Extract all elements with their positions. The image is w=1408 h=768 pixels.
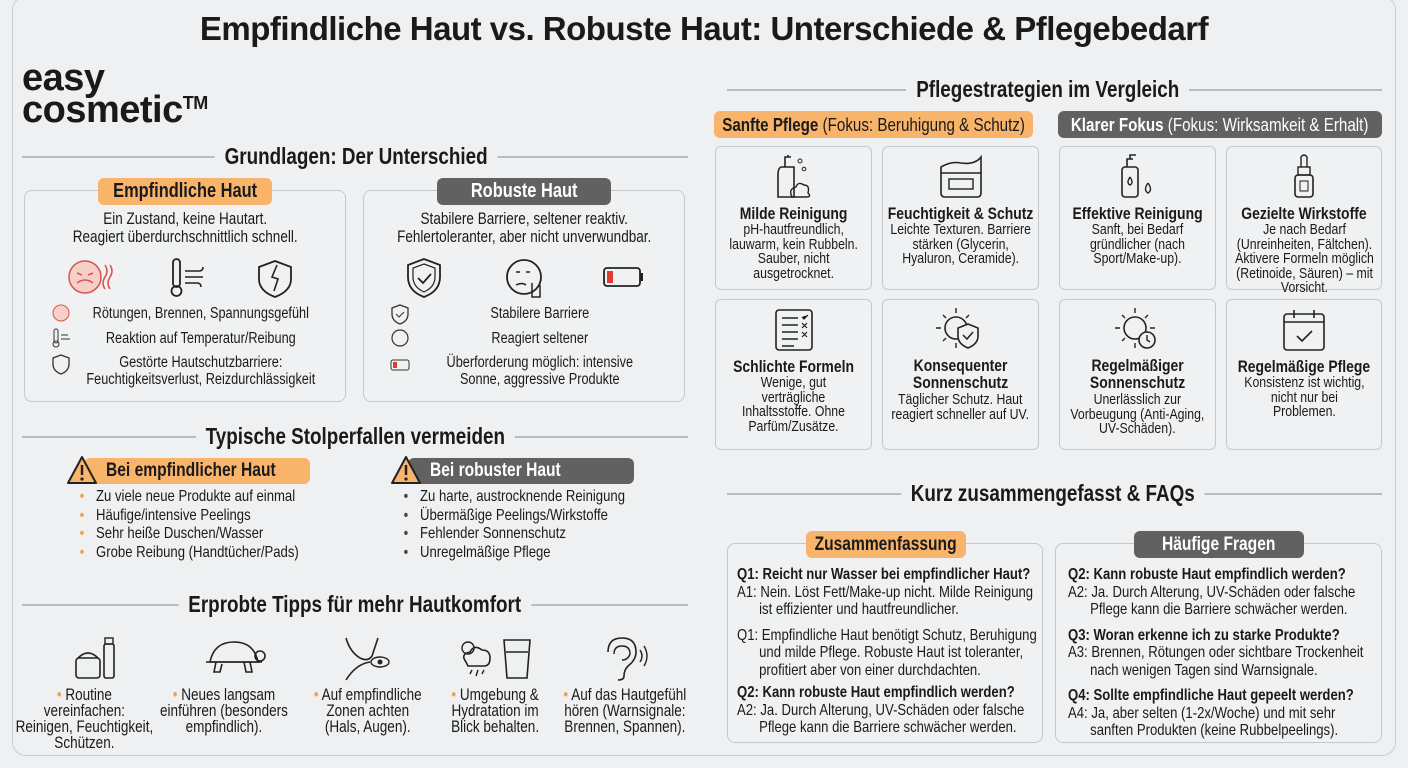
panel: Zusammenfassung — [727, 543, 1043, 743]
list: Fehlender Sonnenschutz — [420, 525, 566, 542]
card: Milde Reinigung: Milde Reinigung — [740, 204, 847, 223]
card: Konsequenter Sonnenschutz: Sonnenschutz — [913, 373, 1008, 392]
card: Schlichte Formeln: Schlichte Formeln — [733, 357, 854, 376]
card: Schlichte Formeln — [715, 299, 872, 450]
logo: cosmeticTM — [22, 89, 208, 131]
list — [404, 488, 625, 560]
badge: Robuste Haut: Robuste Haut — [471, 180, 577, 202]
card: Gezielte Wirkstoffe: Je nach Bedarf (Unreinheiten, Fältchen). Aktivere Formeln möglich (Retinoide, Säuren) – mit Vorsicht. — [1235, 221, 1373, 296]
list: Grobe Reibung (Handtücher/Pads) — [96, 544, 299, 560]
tip 3: • Auf empfindliche Zonen achten (Hals, Augen). — [314, 686, 422, 736]
panel: Empfindliche Haut: Reaktion auf Temperatur/Reibung — [106, 330, 296, 347]
heading: Pflegestrategien: Pflegestrategien im Vergleich — [916, 76, 1180, 102]
tip 2 — [160, 641, 288, 736]
card: Feuchtigkeit & Schutz: Feuchtigkeit & Schutz — [888, 204, 1033, 223]
text: description: Stabilere Barriere, seltener reaktiv. — [420, 210, 628, 228]
card: Milde Reinigung: pH-hautfreundlich, lauwarm, kein Rubbeln. Sauber, nicht ausgetrocknet. — [729, 221, 858, 282]
card: Effektive Reinigung: Effektive Reinigung — [1072, 204, 1203, 223]
card: Milde Reinigung — [715, 146, 872, 290]
logo — [22, 57, 208, 131]
faq text: Q1: Empfindliche Haut benötigt Schutz, Beruhigung und milde Pflege. Robuste Haut ist toleranter, profitiert aber von einer durchdachten. — [737, 626, 1037, 678]
tip 3 — [314, 638, 422, 736]
badge: Sanfte Pflege: Sanfte Pflege (Fokus: Beruhigung & Schutz) — [722, 114, 1025, 135]
card: Gezielte Wirkstoffe — [1226, 146, 1382, 290]
faq text: Q2: Kann robuste Haut empfindlich werden? — [1068, 566, 1346, 583]
panel: Robuste Haut: Sonne, aggressive Produkte — [460, 371, 620, 388]
badge: Empfindliche Haut — [98, 178, 272, 205]
text: description — [73, 210, 297, 246]
panel: Empfindliche Haut: Feuchtigkeitsverlust, Reizdurchlässigkeit — [87, 371, 315, 388]
text: description: Reagiert überdurchschnittlich schnell. — [73, 228, 297, 246]
badge with warning — [408, 458, 634, 484]
panel: Robuste Haut: Überforderung möglich: intensive — [447, 354, 633, 371]
card: Regelmäßige Pflege — [1226, 299, 1382, 450]
faq text — [737, 566, 1037, 736]
badge: Robuste Haut — [437, 178, 611, 205]
text: description: Ein Zustand, keine Hautart. — [103, 210, 267, 228]
heading: Tipps: Erprobte Tipps für mehr Hautkomfort — [189, 591, 521, 617]
block: pitfalls sensitive — [67, 456, 310, 560]
heading: Kurz zusammengefasst: Kurz zusammengefasst & FAQs — [911, 480, 1195, 506]
icon row — [407, 258, 643, 298]
faq text: A1: Nein. Löst Fett/Make-up nicht. Milde Reinigung ist effizienter und hautfreundlicher. — [737, 584, 1033, 618]
card: Regelmäßiger Sonnenschutz: Unerlässlich zur Vorbeugung (Anti-Aging, UV-Schäden). — [1070, 391, 1205, 437]
badge — [1134, 531, 1304, 558]
card: Schlichte Formeln: Wenige, gut verträgliche Inhaltsstoffe. Ohne Parfüm/Zusätze. — [742, 374, 845, 434]
tips row — [15, 637, 686, 752]
card: Effektive Reinigung — [1059, 146, 1216, 290]
list: symptoms — [52, 304, 316, 388]
card: Regelmäßiger Sonnenschutz: Sonnenschutz — [1090, 373, 1185, 392]
tip 5 — [564, 637, 686, 736]
card: Konsequenter Sonnenschutz: Konsequenter — [914, 356, 1007, 375]
panel: Empfindliche Haut: Rötungen, Brennen, Spannungsgefühl — [93, 305, 309, 322]
badge with warning — [84, 458, 310, 484]
title: Empfindliche Haut vs. Robuste Haut: Unterschiede & Pflegebedarf — [200, 10, 1208, 47]
heading: Stolperfallen: Typische Stolperfallen vermeiden — [205, 423, 505, 449]
card: Feuchtigkeit & Schutz: Leichte Texturen. Barriere stärken (Glycerin, Hyaluron, Ceramide). — [890, 221, 1031, 267]
tip 4: • Umgebung & Hydratation im Blick behalten. — [451, 686, 539, 736]
faq text: A3: Brennen, Rötungen oder sichtbare Trockenheit nach wenigen Tagen sind Warnsignale. — [1068, 644, 1363, 678]
card: Konsequenter Sonnenschutz — [882, 299, 1039, 450]
list: properties — [390, 304, 633, 388]
faq text: Q1: Reicht nur Wasser bei empfindlicher Haut? — [737, 566, 1030, 583]
list: Übermäßige Peelings/Wirkstoffe — [420, 506, 608, 524]
card: Gezielte Wirkstoffe: Gezielte Wirkstoffe — [1241, 204, 1367, 223]
list: Unregelmäßige Pflege — [420, 544, 551, 560]
badge with warning: Bei robuster Haut — [430, 460, 561, 481]
faq text — [1068, 566, 1364, 739]
faq text: Q3: Woran erkenne ich zu starke Produkte? — [1068, 626, 1340, 644]
tip 2: • Neues langsam einführen (besonders empfindlich). — [160, 686, 288, 736]
badge: Häufige Fragen — [1162, 534, 1276, 555]
tip 5: • Auf das Hautgefühl hören (Warnsignale: Brennen, Spannen). — [564, 686, 686, 736]
card: Effektive Reinigung: Sanft, bei Bedarf gründlicher (nach Sport/Make-up). — [1090, 221, 1185, 267]
badge: Empfindliche Haut: Empfindliche Haut — [113, 180, 257, 202]
faq text: A2: Ja. Durch Alterung, UV-Schäden oder falsche Pflege kann die Barriere schwächer werden. — [737, 702, 1024, 736]
panel: Empfindliche Haut: Gestörte Hautschutzbarriere: — [119, 354, 283, 371]
card: Feuchtigkeit & Schutz — [882, 146, 1039, 290]
faq text: A2: Ja. Durch Alterung, UV-Schäden oder falsche Pflege kann die Barriere schwächer werden. — [1068, 584, 1355, 618]
block: pitfalls robust — [391, 456, 634, 560]
heading: Grundlagen: Grundlagen: Der Unterschied — [225, 143, 488, 169]
card: Regelmäßige Pflege: Regelmäßige Pflege — [1238, 357, 1370, 376]
list: Zu harte, austrocknende Reinigung — [420, 488, 625, 505]
icon row — [68, 258, 292, 298]
list: Sehr heiße Duschen/Wasser — [96, 525, 263, 542]
faq text: Q4: Sollte empfindliche Haut gepeelt werden? — [1068, 687, 1354, 704]
panel: Empfindliche Haut — [24, 190, 346, 402]
card: Regelmäßige Pflege: Konsistenz ist wichtig, nicht nur bei Problemen. — [1244, 374, 1364, 420]
tip 4 — [451, 639, 539, 736]
faq text: A4: Ja, aber selten (1-2x/Woche) und mit sehr sanften Produkten (keine Rubbelpeelings). — [1068, 704, 1338, 739]
panel: Robuste Haut — [363, 190, 685, 402]
badge with warning: Bei empfindlicher Haut — [106, 460, 276, 481]
list — [80, 488, 299, 560]
card: Regelmäßiger Sonnenschutz: Regelmäßiger — [1091, 356, 1184, 375]
card: Regelmäßiger Sonnenschutz — [1059, 299, 1216, 450]
list: Zu viele neue Produkte auf einmal — [96, 488, 295, 505]
card: Konsequenter Sonnenschutz: Täglicher Schutz. Haut reagiert schneller auf UV. — [892, 391, 1029, 422]
panel: Robuste Haut: Stabilere Barriere — [491, 305, 589, 322]
text: description — [397, 210, 651, 246]
tip 1: • Routine vereinfachen: Reinigen, Feuchtigkeit, Schützen. — [15, 686, 153, 752]
faq text: Q2: Kann robuste Haut empfindlich werden? — [737, 684, 1015, 701]
badge — [806, 531, 966, 558]
text: description: Fehlertoleranter, aber nicht unverwundbar. — [397, 228, 651, 246]
panel: Robuste Haut: Reagiert seltener — [492, 330, 588, 347]
list: Häufige/intensive Peelings — [96, 506, 251, 524]
logo: easy — [22, 57, 105, 99]
tip 1 — [15, 637, 153, 752]
panel: Häufige Fragen — [1055, 543, 1382, 743]
badge: Zusammenfassung — [815, 534, 957, 555]
badge: Klarer Fokus: Klarer Fokus (Fokus: Wirksamkeit & Erhalt) — [1071, 114, 1369, 135]
